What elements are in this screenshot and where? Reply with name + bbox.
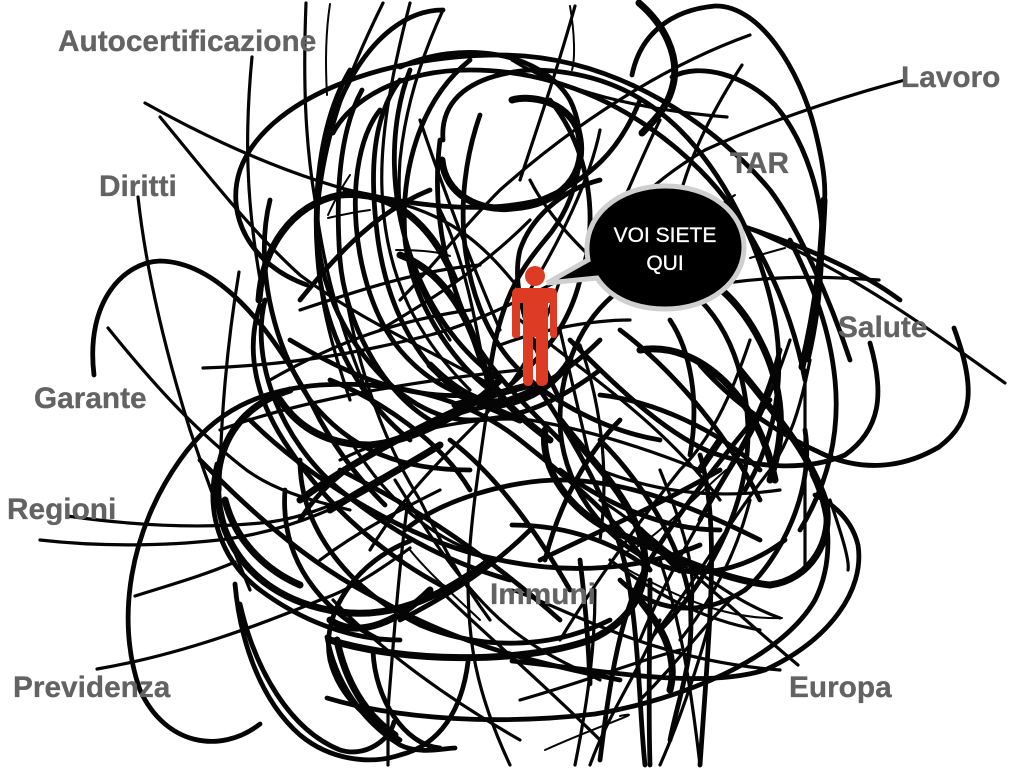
speech bubble: VOI SIETE QUI: VOI SIETE xyxy=(614,224,716,247)
label: Regioni: Regioni xyxy=(7,493,116,526)
label: Diritti: Diritti xyxy=(99,170,177,203)
speech bubble: VOI SIETE QUI: QUI xyxy=(646,252,684,275)
thick loops xyxy=(218,3,827,735)
speech bubble: VOI SIETE QUI xyxy=(547,186,744,309)
label: Immuni: Immuni xyxy=(490,578,596,611)
label: Europa: Europa xyxy=(789,671,892,704)
label: Salute: Salute xyxy=(838,311,927,344)
label: Garante: Garante xyxy=(34,382,147,415)
label: Previdenza: Previdenza xyxy=(13,671,171,704)
icon: red person xyxy=(512,266,557,386)
hairline strands xyxy=(326,4,785,750)
label: TAR: TAR xyxy=(730,147,789,180)
label: Autocertificazione: Autocertificazione xyxy=(58,25,316,58)
label: Lavoro: Lavoro xyxy=(901,61,1000,94)
